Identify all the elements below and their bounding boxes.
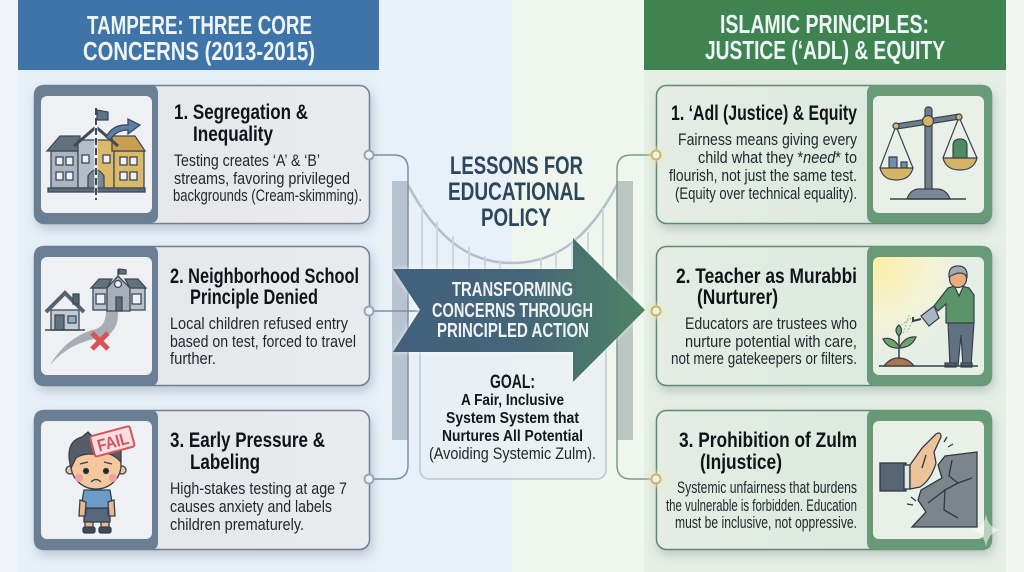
heading line 3: POLICY (481, 204, 551, 232)
card text line 3: not mere gatekeepers or filters. (671, 350, 857, 368)
arrow text line 1: TRANSFORMING (452, 279, 573, 301)
background right (512, 0, 1024, 572)
card text line 3: flourish, not just the same test. (669, 167, 857, 185)
card: segregation and inequality (34, 85, 370, 224)
icon: balance scales (880, 107, 977, 199)
card text line 1: Fairness means giving every (678, 131, 858, 149)
card title: 3. Prohibition of Zulm (679, 428, 857, 452)
card text line 2: streams, favoring privileged (174, 170, 350, 188)
card: adl justice (656, 85, 992, 224)
stamp border (90, 426, 135, 457)
card text line 2: based on test, forced to travel (170, 333, 356, 351)
card title: 1. ‘Adl (Justice) & Equity (671, 101, 857, 125)
card text line 3: further. (170, 350, 216, 368)
icon: hand stopping cracked wall (880, 433, 977, 527)
card: teacher as murabbi (656, 246, 992, 386)
icon tile (41, 421, 152, 539)
fail stamp (90, 426, 135, 457)
icon tile (873, 96, 984, 213)
icon frame (867, 246, 992, 386)
central heading (448, 152, 585, 232)
card title line 2: (Injustice) (700, 450, 782, 474)
right column background (644, 70, 1006, 572)
icon frame (34, 85, 158, 223)
background left (0, 0, 512, 572)
card body (656, 246, 992, 386)
card title: 2. Teacher as Murabbi (676, 264, 857, 288)
goal label: GOAL: (490, 372, 535, 393)
connector lines (369, 155, 656, 479)
stamp word: FAIL (95, 429, 131, 456)
card title: 1. Segregation & (174, 100, 308, 124)
icon frame (34, 246, 158, 386)
left middle connector (369, 310, 420, 312)
icon frame (34, 410, 158, 550)
card text line 1: Educators are trustees who (685, 315, 857, 333)
suspension cable (408, 185, 617, 263)
water spray (900, 315, 912, 334)
header bar (644, 0, 1006, 70)
card title line 2: Inequality (193, 122, 273, 146)
left header (18, 0, 379, 70)
icon: teacher watering plant (879, 266, 978, 367)
goal line 4: (Avoiding Systemic Zulm). (429, 445, 596, 463)
icon: sad child with fail stamp (66, 432, 126, 533)
card body (34, 86, 370, 224)
card title: 3. Early Pressure & (170, 428, 325, 452)
header line 2: JUSTICE (‘ADL) & EQUITY (705, 37, 945, 65)
left bridge tower (392, 181, 408, 440)
card: prohibition of zulm (656, 410, 992, 550)
card body (656, 410, 992, 550)
card text line 1: High-stakes testing at age 7 (170, 480, 347, 498)
header line 2: CONCERNS (2013-2015) (83, 38, 315, 66)
card text line 1: Systemic unfairness that burdens (677, 479, 857, 497)
card body (656, 86, 992, 224)
arrow text line 3: PRINCIPLED ACTION (437, 320, 589, 342)
outer margin left (0, 0, 18, 572)
icon tile (41, 96, 152, 213)
card text line 1: Local children refused entry (170, 315, 349, 333)
goal line 3: Nurtures All Potential (442, 428, 583, 445)
left nodes (364, 150, 374, 484)
card body (34, 410, 370, 550)
header line 1: TAMPERE: THREE CORE (87, 12, 312, 40)
card text line 2: child what they *need* to (698, 149, 857, 167)
card text line 4: (Equity over technical equality). (675, 185, 857, 203)
goal line 1: A Fair, Inclusive (461, 392, 564, 409)
card text line 3: backgrounds (Cream-skimming). (173, 187, 362, 205)
heading line 1: LESSONS FOR (450, 152, 583, 180)
icon tile (873, 257, 984, 375)
connector nodes (364, 148, 663, 486)
header line 1: ISLAMIC PRINCIPLES: (720, 11, 929, 39)
bridge illustration (392, 181, 633, 440)
card title line 2: Principle Denied (190, 285, 318, 309)
right header (644, 0, 1006, 70)
card: neighborhood school (34, 246, 370, 386)
card text line 2: causes anxiety and labels (170, 498, 332, 516)
icon: divided school (47, 108, 145, 200)
arrow shape (393, 238, 645, 382)
icon frame (867, 85, 992, 223)
arrow glow (393, 238, 645, 382)
hangers (422, 205, 603, 270)
card title: 2. Neighborhood School (170, 264, 359, 288)
card title line 2: Labeling (190, 450, 260, 474)
right bridge tower (617, 181, 633, 440)
card body (34, 246, 370, 386)
left connector bracket (369, 155, 408, 479)
card text line 2: nurture potential with care, (685, 333, 857, 351)
icon tile (41, 257, 152, 375)
icon frame (867, 410, 992, 550)
outer margin right (1006, 0, 1024, 572)
icon tile (873, 421, 984, 539)
watermark sparkle (972, 514, 1000, 547)
right node glow (649, 148, 663, 486)
central arrow (393, 238, 645, 382)
goal box outline (420, 340, 606, 479)
goal box (420, 340, 606, 479)
card text line 2: the vulnerable is forbidden. Education (666, 497, 857, 515)
card text line 3: must be inclusive, not oppressive. (675, 514, 857, 532)
heading line 2: EDUCATIONAL (448, 178, 585, 206)
card text line 1: Testing creates ‘A’ & ‘B’ (174, 152, 320, 170)
card text line 3: children prematurely. (170, 516, 304, 534)
card title line 2: (Nurturer) (697, 285, 778, 309)
card: early pressure (34, 410, 370, 550)
goal line 2: System System that (446, 410, 580, 427)
left column background (18, 70, 379, 572)
right connector bracket (617, 155, 656, 479)
right nodes (652, 150, 660, 484)
arrow text line 2: CONCERNS THROUGH (432, 300, 593, 322)
header bar (18, 0, 379, 70)
icon: home, school and blocked road (45, 269, 146, 365)
